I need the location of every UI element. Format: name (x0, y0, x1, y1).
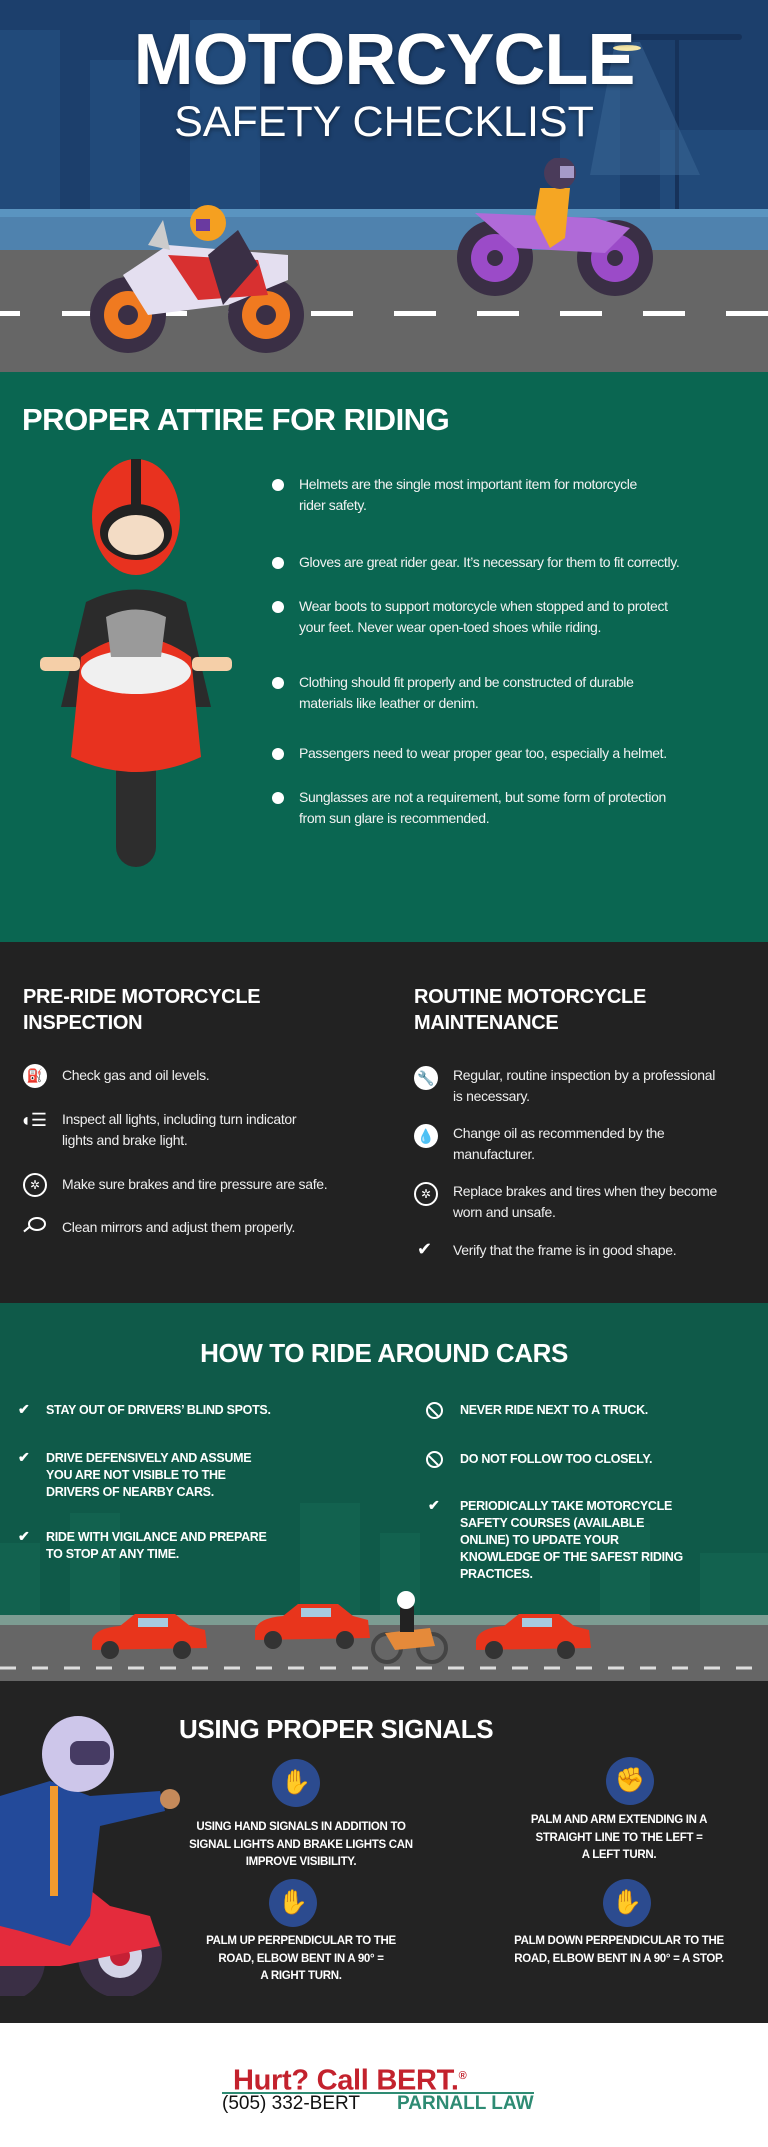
bullet list: attire: from sun glare is recommended. (299, 810, 489, 826)
icon: arm extended left: ✊ (615, 1767, 645, 1794)
list: maintenance: Change oil as recommended by the (453, 1125, 664, 1141)
list: do items: DRIVE DEFENSIVELY AND ASSUME (46, 1451, 251, 1465)
list: maintenance: is necessary. (453, 1088, 530, 1104)
heading: using proper signals: USING PROPER SIGNALS (179, 1714, 493, 1744)
heading: how to ride around cars: HOW TO RIDE AROUND CARS (200, 1338, 568, 1368)
icon: hand up (signal) (272, 1759, 320, 1807)
icon: arm extended left (606, 1757, 654, 1805)
list: maintenance: manufacturer. (453, 1146, 535, 1162)
list: do items: TO STOP AT ANY TIME. (46, 1547, 179, 1561)
list: avoid items: DO NOT FOLLOW TOO CLOSELY. (460, 1452, 652, 1466)
text: right turn: ROAD, ELBOW BENT IN A 90° = (218, 1952, 384, 1964)
logo: Hurt? Call BERT.: Hurt? Call BERT.® (233, 2065, 466, 2097)
list: avoid items: SAFETY COURSES (AVAILABLE (460, 1516, 644, 1530)
list: do items: STAY OUT OF DRIVERS’ BLIND SPOTS. (46, 1403, 271, 1417)
icon: purple motorcycle rider (457, 158, 653, 296)
bullet list: attire: materials like leather or denim. (299, 695, 478, 711)
logo: Hurt? Call BERT.: (505) 332-BERT (222, 2093, 360, 2114)
list: avoid items (426, 1402, 683, 1581)
list: do items: ✔ (18, 1449, 29, 1465)
icon: hand up (signal): ✋ (281, 1769, 311, 1796)
text: stop (514, 1935, 724, 1964)
list: inspection: Check gas and oil levels. (62, 1067, 209, 1083)
bullet list: attire: Passengers need to wear proper gear too, especially a helmet. (299, 745, 667, 761)
text: hand signals note (189, 1821, 413, 1868)
text: stop: ROAD, ELBOW BENT IN A 90° = A STOP. (514, 1952, 724, 1964)
bullet list: attire: Wear boots to support motorcycle when stopped and to protect (299, 598, 668, 614)
bullet list: attire: Helmets are the single most important item for motorcycle (299, 476, 637, 492)
list: inspection: Inspect all lights, including turn indicator (62, 1111, 296, 1127)
list: inspection: lights and brake light. (62, 1132, 187, 1148)
list: maintenance: ✲ (421, 1187, 431, 1201)
list: maintenance: Replace brakes and tires when they become (453, 1183, 717, 1199)
text: right turn: PALM UP PERPENDICULAR TO THE (206, 1935, 396, 1947)
text: left turn: STRAIGHT LINE TO THE LEFT = (535, 1832, 703, 1844)
list: maintenance: ✔ (417, 1239, 432, 1259)
list: inspection: ◖☰ (20, 1110, 47, 1130)
heading: routine maintenance: MAINTENANCE (414, 1012, 558, 1034)
list: do items: YOU ARE NOT VISIBLE TO THE (46, 1468, 226, 1482)
list: inspection (20, 1064, 327, 1235)
text: stop: PALM DOWN PERPENDICULAR TO THE (514, 1935, 724, 1947)
heading: pre-ride inspection (23, 986, 260, 1034)
list: maintenance: 🔧 (417, 1070, 435, 1086)
icon: rider giving thumbs-up signal (0, 1716, 180, 1996)
heading: pre-ride inspection: INSPECTION (23, 1012, 142, 1034)
icon: front-facing motorcycle rider (40, 459, 232, 867)
list: inspection: Clean mirrors and adjust them properly. (62, 1219, 295, 1235)
heading: routine maintenance (414, 986, 646, 1034)
header: city night scene (0, 0, 768, 372)
text: hand signals note: IMPROVE VISIBILITY. (246, 1856, 356, 1868)
list: do items: RIDE WITH VIGILANCE AND PREPARE (46, 1530, 267, 1544)
list: avoid items: KNOWLEDGE OF THE SAFEST RIDING (460, 1550, 683, 1564)
panel: proper attire (0, 372, 768, 942)
list: avoid items: NEVER RIDE NEXT TO A TRUCK. (460, 1403, 648, 1417)
list: avoid items: ONLINE) TO UPDATE YOUR (460, 1533, 619, 1547)
list: maintenance: Verify that the frame is in good shape. (453, 1242, 676, 1258)
text: right turn (206, 1935, 396, 1982)
text: left turn (531, 1814, 708, 1861)
bullet list: attire: your feet. Never wear open-toed shoes while riding. (299, 619, 601, 635)
bullet list: attire: Clothing should fit properly and be constructed of durable (299, 674, 634, 690)
list: maintenance: Regular, routine inspection by a professional (453, 1067, 715, 1083)
icon: palm down: ✋ (612, 1889, 642, 1916)
list: maintenance: 💧 (417, 1128, 435, 1144)
title (134, 20, 634, 146)
bullet list: attire: rider safety. (299, 497, 367, 513)
bullet list: attire: Sunglasses are not a requirement, but some form of protection (299, 789, 666, 805)
heading: proper attire: PROPER ATTIRE FOR RIDING (22, 402, 449, 437)
list: maintenance: worn and unsafe. (453, 1204, 556, 1220)
logo: Hurt? Call BERT. (222, 2065, 534, 2114)
text: hand signals note: USING HAND SIGNALS IN ADDITION TO (196, 1821, 406, 1833)
heading: pre-ride inspection: PRE-RIDE MOTORCYCLE (23, 986, 260, 1008)
footer: logo (0, 2023, 768, 2147)
text: left turn: A LEFT TURN. (582, 1849, 656, 1861)
list: do items: ✔ (18, 1401, 29, 1417)
list: do items (18, 1401, 271, 1561)
title: MOTORCYCLE (134, 20, 634, 100)
logo: Hurt? Call BERT.: PARNALL LAW (397, 2093, 534, 2114)
icon: orange motorcycle rider (90, 205, 304, 353)
title: SAFETY CHECKLIST (174, 98, 594, 146)
bullet list: attire (272, 476, 679, 826)
panel: inspection and maintenance (0, 942, 768, 1303)
road with cars (0, 1591, 768, 1681)
list: maintenance (414, 1066, 717, 1259)
panel: using proper signals (0, 1681, 768, 2023)
panel: how to ride around cars (0, 1303, 768, 1681)
list: do items: DRIVERS OF NEARBY CARS. (46, 1485, 214, 1499)
text: left turn: PALM AND ARM EXTENDING IN A (531, 1814, 707, 1826)
list: inspection: Make sure brakes and tire pressure are safe. (62, 1176, 327, 1192)
list: inspection: ✲ (30, 1178, 40, 1192)
list: avoid items: PERIODICALLY TAKE MOTORCYCLE (460, 1499, 672, 1513)
text: right turn: A RIGHT TURN. (260, 1970, 342, 1982)
list: do items: ✔ (18, 1528, 29, 1544)
icon: palm up: ✋ (278, 1889, 308, 1916)
list: avoid items: ✔ (428, 1497, 439, 1513)
text: hand signals note: SIGNAL LIGHTS AND BRAKE LIGHTS CAN (189, 1838, 413, 1850)
icon: palm up (269, 1879, 317, 1927)
list: avoid items: PRACTICES. (460, 1567, 533, 1581)
bullet list: attire: Gloves are great rider gear. It’s necessary for them to fit correctly. (299, 554, 679, 570)
heading: routine maintenance: ROUTINE MOTORCYCLE (414, 986, 646, 1008)
list: inspection: ⛽ (27, 1068, 43, 1083)
icon: palm down (603, 1879, 651, 1927)
